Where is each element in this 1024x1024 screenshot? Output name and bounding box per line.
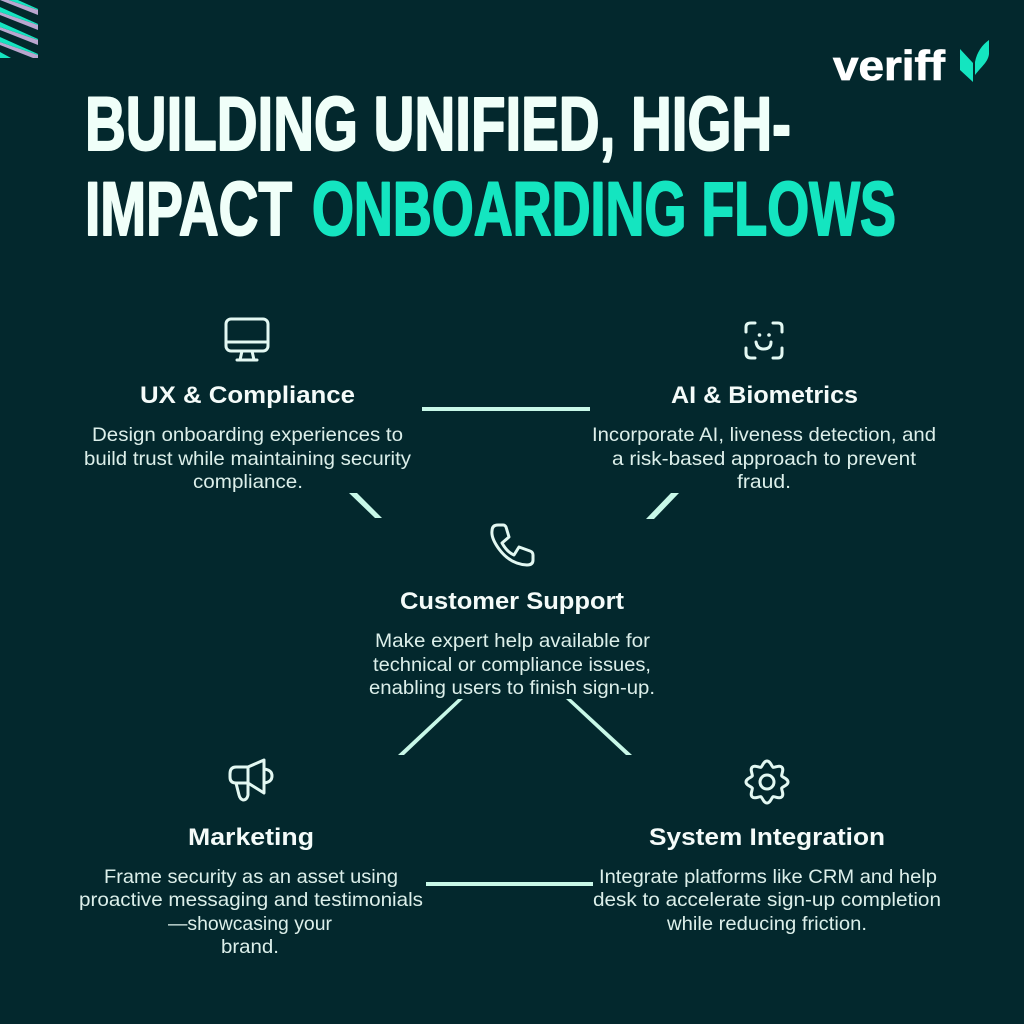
title: IMPACT bbox=[85, 167, 292, 252]
panel: UX & Compliance bbox=[84, 319, 411, 493]
panel: Marketing bbox=[79, 760, 423, 958]
logo: veriff: veriff bbox=[833, 42, 946, 89]
panel: System Integration bbox=[593, 761, 941, 935]
body text: Frame security as an asset using bbox=[104, 866, 398, 888]
body text: fraud. bbox=[737, 471, 791, 493]
title bbox=[85, 82, 896, 252]
connector: lower left bbox=[398, 699, 463, 755]
icon: logo leaf bbox=[960, 40, 989, 82]
body text: a risk-based approach to prevent bbox=[612, 448, 917, 470]
decorative corner stripes bbox=[0, 0, 38, 58]
body text: Integrate platforms like CRM and help bbox=[599, 866, 937, 888]
heading: UX & Compliance bbox=[140, 382, 355, 409]
body text: build trust while maintaining security bbox=[84, 448, 411, 470]
heading: Marketing bbox=[188, 824, 314, 851]
connector: top bbox=[422, 407, 590, 411]
connector: upper left bbox=[349, 493, 382, 518]
panel: Customer Support bbox=[369, 525, 655, 699]
body text: Make expert help available for bbox=[375, 630, 651, 652]
body text: Incorporate AI, liveness detection, and bbox=[592, 424, 936, 446]
icon: gear bbox=[746, 761, 788, 803]
body text: enabling users to finish sign-up. bbox=[369, 677, 655, 699]
icon: phone bbox=[492, 525, 533, 565]
body text: —showcasing your bbox=[168, 913, 332, 935]
panel: AI & Biometrics bbox=[592, 323, 936, 493]
connector: bottom bbox=[426, 882, 593, 886]
body text: technical or compliance issues, bbox=[373, 654, 651, 676]
connector: lower right bbox=[566, 699, 632, 755]
body text bbox=[593, 866, 941, 935]
icon: monitor bbox=[226, 319, 268, 360]
title: BUILDING UNIFIED, HIGH- bbox=[85, 82, 791, 167]
body text bbox=[592, 424, 936, 493]
icon: face scan bbox=[746, 323, 782, 358]
icon: megaphone bbox=[230, 760, 272, 800]
logo: veriff bbox=[833, 40, 989, 89]
connector: upper right bbox=[646, 493, 679, 519]
body text bbox=[79, 866, 423, 958]
body text: compliance. bbox=[193, 471, 303, 493]
body text bbox=[369, 630, 655, 699]
body text: desk to accelerate sign-up completion bbox=[593, 889, 941, 911]
body text bbox=[84, 424, 411, 493]
heading: AI & Biometrics bbox=[671, 382, 858, 409]
body text: brand. bbox=[221, 936, 279, 958]
body text: while reducing friction. bbox=[666, 913, 867, 935]
heading: Customer Support bbox=[400, 588, 624, 615]
body text: proactive messaging and testimonials bbox=[79, 889, 423, 911]
heading: System Integration bbox=[649, 824, 885, 851]
body text: Design onboarding experiences to bbox=[92, 424, 403, 446]
